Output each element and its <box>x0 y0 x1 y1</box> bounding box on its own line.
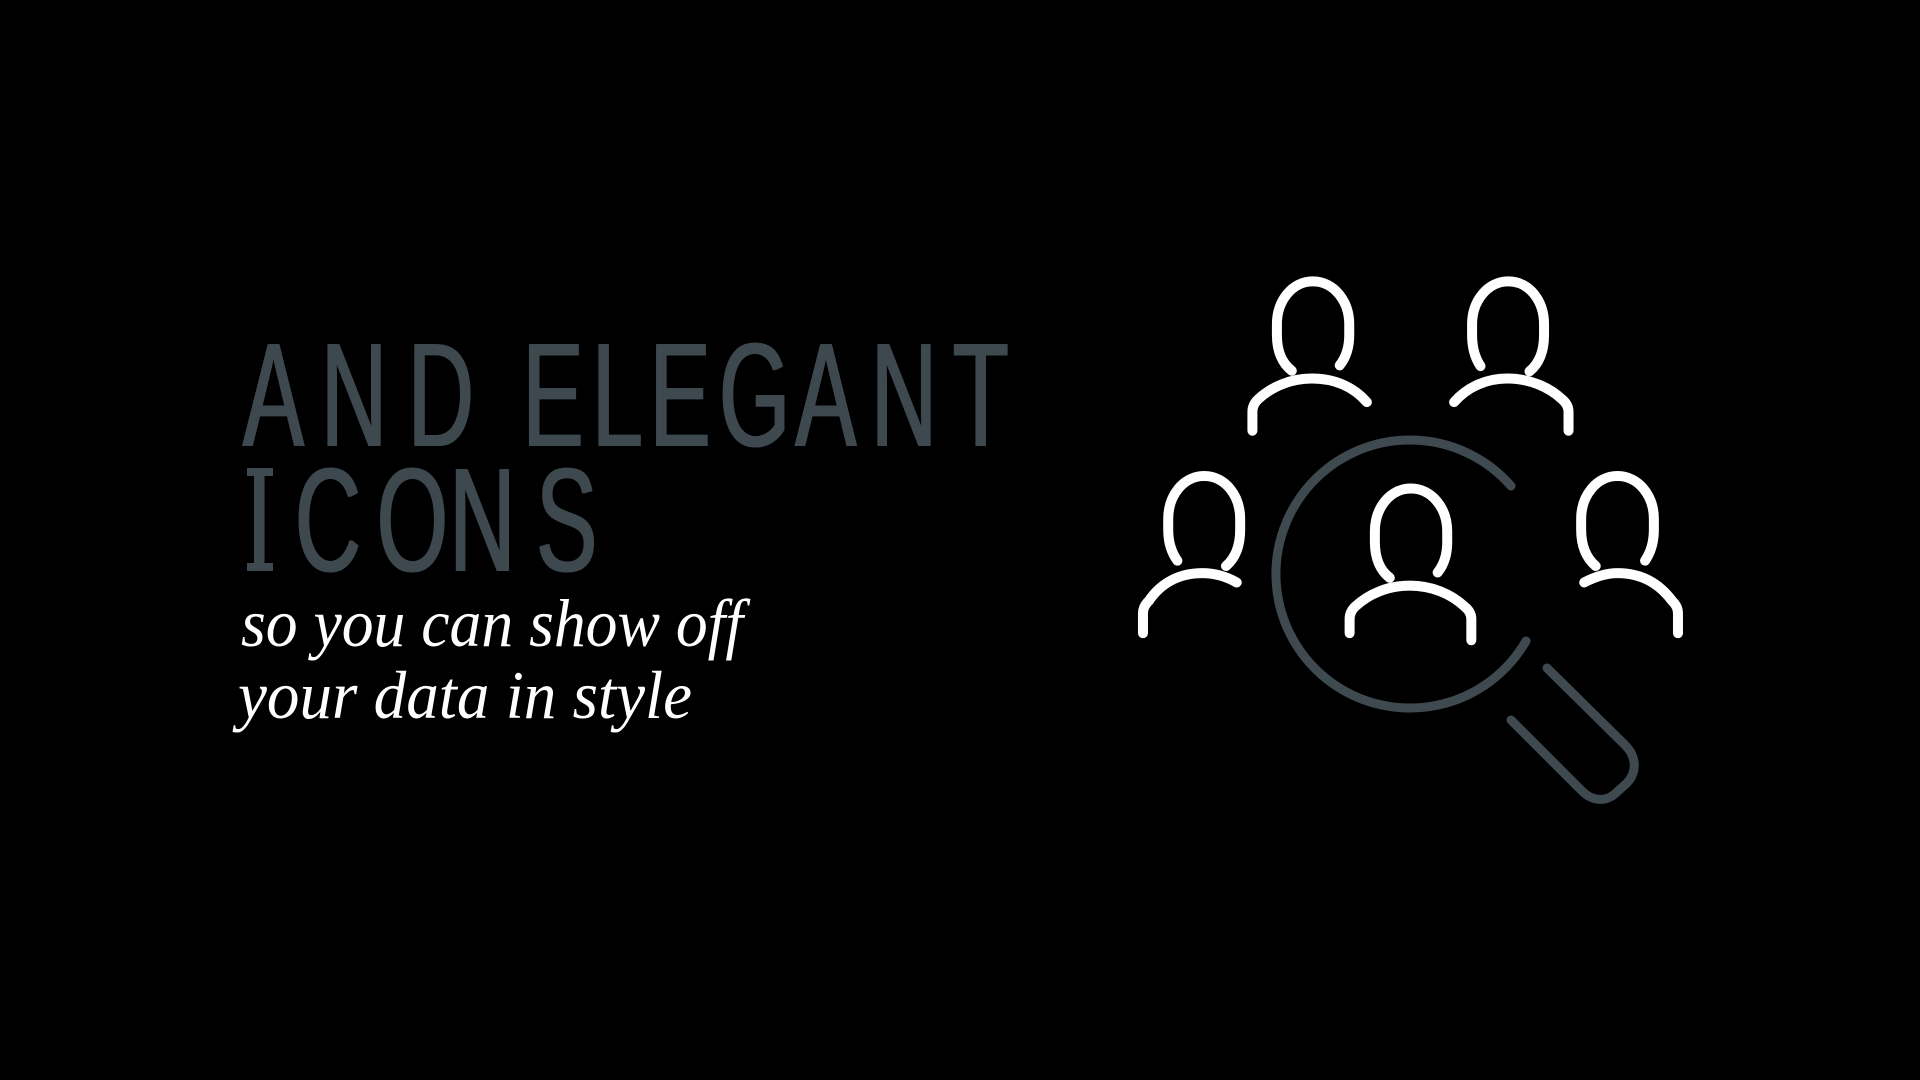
person: middle right <box>1581 476 1678 633</box>
subtitle text: so you can show off <box>241 585 751 661</box>
person: top left <box>1252 281 1367 431</box>
subtitle text <box>232 585 751 733</box>
icon: people group <box>1143 281 1678 640</box>
person: middle left <box>1143 476 1240 633</box>
heading: AND ELEGANT ICONS: AND ELEGANT <box>242 314 1008 478</box>
person: centre <box>1350 489 1471 640</box>
heading: AND ELEGANT ICONS <box>242 314 1008 603</box>
heading: AND ELEGANT ICONS: ICONS <box>246 439 596 603</box>
icon: magnifying glass <box>1276 440 1634 799</box>
subtitle text: your data in style <box>232 657 692 733</box>
person: top right <box>1454 281 1569 431</box>
